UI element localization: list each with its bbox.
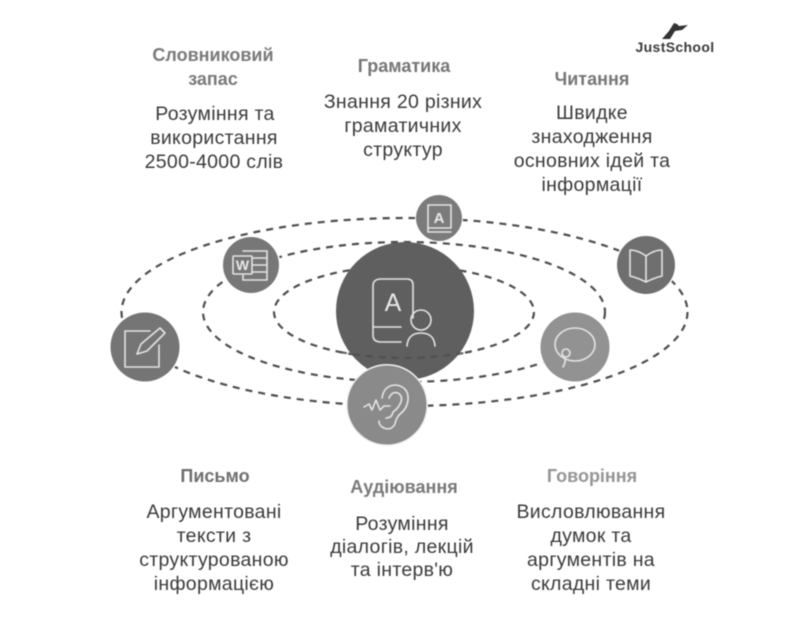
heading block: vocabulary: 2500-4000 слів xyxy=(145,151,283,173)
heading block: writing: структурованою xyxy=(139,549,289,571)
heading block: grammar xyxy=(324,56,482,161)
logo: JustSchool xyxy=(636,23,714,55)
heading block: reading: знаходження xyxy=(531,126,653,148)
heading block: grammar: Граматика xyxy=(358,56,451,76)
heading block: speaking xyxy=(516,466,666,595)
heading block: writing: тексти з xyxy=(177,525,251,547)
heading block: listening: та інтерв'ю xyxy=(351,559,453,581)
heading block: vocabulary: Словниковий xyxy=(152,45,274,65)
icon: central book and person xyxy=(373,279,435,346)
heading block: speaking: складні теми xyxy=(531,573,651,595)
heading block: listening: Розуміння xyxy=(355,513,449,535)
heading block: writing: Аргументовані xyxy=(146,501,282,523)
heading block: writing: Письмо xyxy=(180,466,250,486)
logo: JustSchool: JustSchool xyxy=(636,39,714,55)
heading block: vocabulary xyxy=(145,45,283,173)
heading block: reading: Читання xyxy=(555,69,629,89)
node: grammar: A xyxy=(434,210,445,227)
orbit: inner front arc xyxy=(340,352,470,358)
heading block: writing xyxy=(139,466,289,595)
heading block: grammar: структур xyxy=(363,139,443,161)
heading block: speaking: Говоріння xyxy=(547,466,637,486)
node: vocabulary xyxy=(222,236,280,294)
node: vocabulary: W xyxy=(236,257,250,273)
heading block: reading: інформації xyxy=(541,174,643,196)
heading block: listening xyxy=(330,477,474,581)
heading block: speaking: Висловлювання xyxy=(516,501,666,523)
heading block: speaking: аргументів на xyxy=(527,549,655,571)
orbit: middle xyxy=(203,242,605,382)
heading block: grammar: Знання 20 різних xyxy=(324,91,482,113)
orbit: outer xyxy=(122,218,688,406)
heading block: reading: Швидке xyxy=(556,102,628,124)
heading block: grammar: граматичних xyxy=(344,115,462,137)
orbit: inner xyxy=(274,266,534,358)
icon: central book and person: A xyxy=(385,289,402,317)
heading block: vocabulary: запас xyxy=(188,69,238,89)
orbit diagram xyxy=(109,194,688,446)
heading block: reading: основних ідей та xyxy=(514,150,670,172)
node: speaking xyxy=(539,311,611,383)
heading block: vocabulary: використання xyxy=(150,127,278,149)
heading block: reading xyxy=(514,69,670,196)
heading block: vocabulary: Розуміння та xyxy=(155,103,275,125)
heading block: listening: Аудіювання xyxy=(350,477,458,497)
node: reading xyxy=(616,234,676,296)
central circle xyxy=(336,242,474,380)
heading block: listening: діалогів, лекцій xyxy=(330,536,474,558)
node: writing xyxy=(109,311,181,383)
heading block: writing: інформацією xyxy=(154,573,274,595)
node: listening xyxy=(346,364,428,446)
node: grammar xyxy=(415,194,463,242)
heading block: speaking: думок та xyxy=(550,525,632,547)
